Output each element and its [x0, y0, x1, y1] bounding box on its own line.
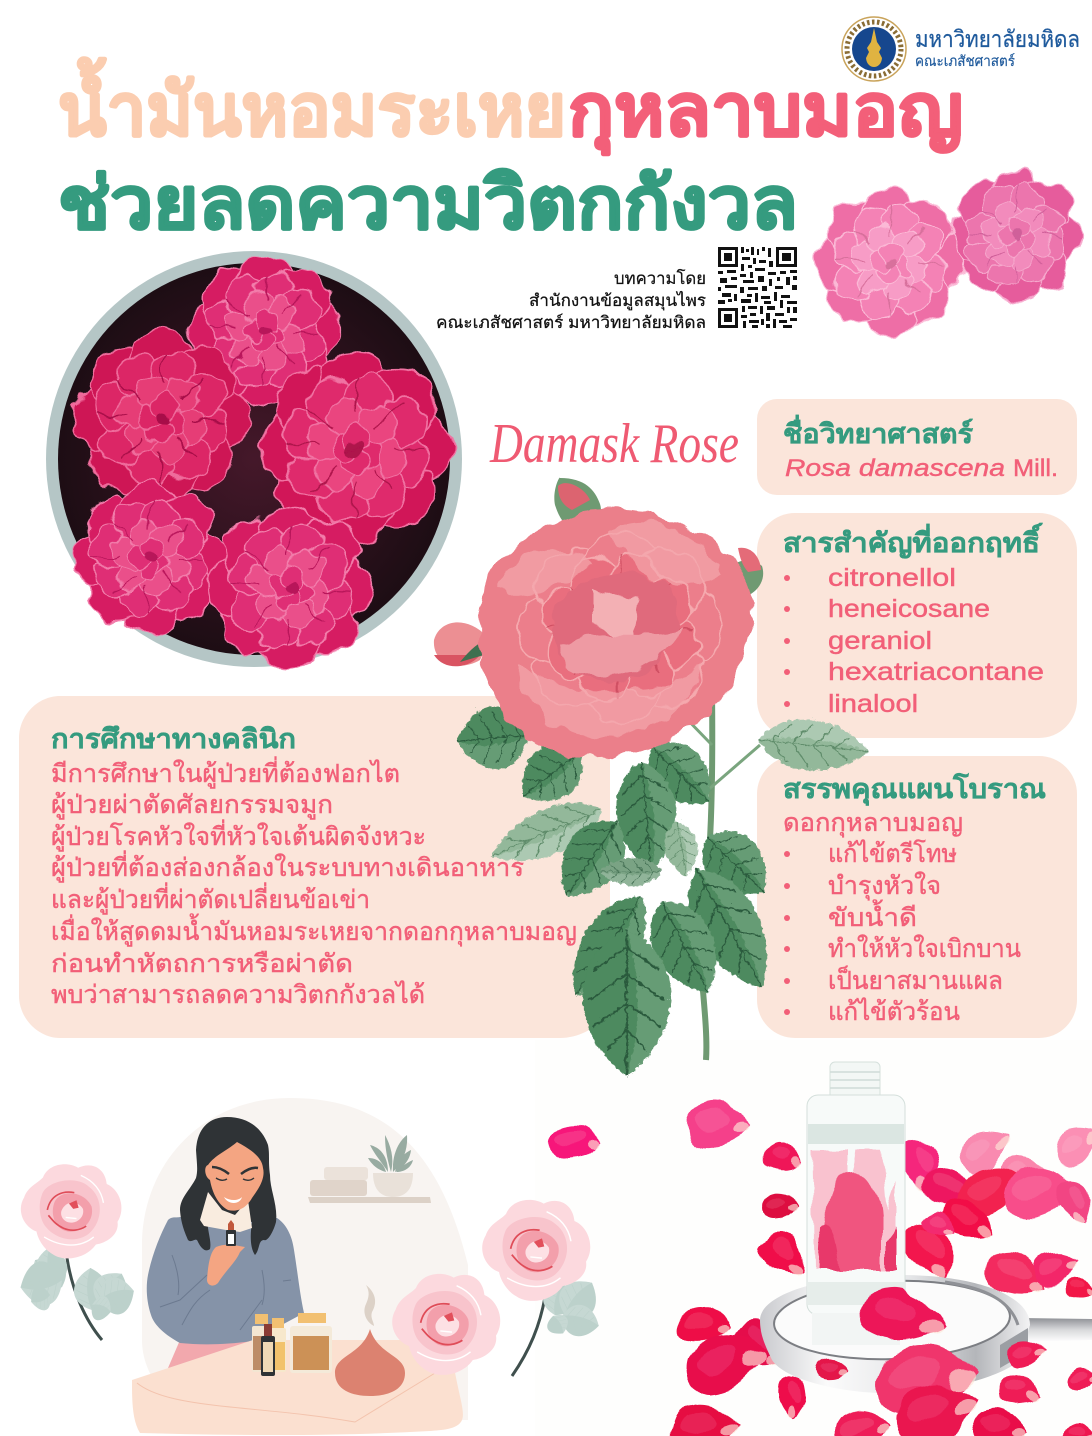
compound list: heneicosane: [828, 595, 990, 623]
compound list: linalool: [828, 690, 918, 718]
photo background: bottom right: [535, 1040, 1092, 1436]
uses list: แก้ไข้ตัวร้อน: [828, 997, 960, 1026]
compound list: citronellol: [828, 564, 956, 592]
panel: traditional uses: [757, 756, 1077, 1038]
panel: scientific name: ชื่อวิทยาศาสตร์: [783, 414, 974, 449]
panel: volatile compounds: สารสำคัญที่ออกฤทธิ์: [783, 523, 1043, 559]
title: น้ำมันหอมระเหย: [58, 57, 566, 151]
buds: [434, 478, 763, 666]
uses list: ขับน้ำดี: [828, 899, 917, 932]
title: กุหลาบมอญ: [568, 71, 963, 156]
QR code: [718, 247, 797, 328]
roses: [74, 255, 452, 669]
diffuser: [335, 1285, 405, 1396]
flower right with stem: [482, 1200, 606, 1376]
uses list: [784, 839, 1021, 1026]
body text: เมื่อให้สูดดมน้ำมันหอมระเหยจากดอกกุหลาบมอญ: [51, 913, 577, 947]
panel: traditional uses: สรรพคุณแผนโบราณ: [783, 772, 1046, 806]
panel: scientific name: [757, 399, 1077, 495]
body text: และผู้ป่วยที่ผ่าตัดเปลี่ยนข้อเข่า: [51, 882, 370, 915]
botanical rose illustration: [434, 478, 869, 1075]
foreground petals: [663, 1287, 1092, 1436]
title: ช่วยลดความวิตกกังวล: [58, 164, 798, 244]
glass bottle: [807, 1062, 905, 1345]
title: [58, 57, 963, 244]
woman: [147, 1117, 304, 1368]
flower head: [478, 509, 752, 757]
heading: การศึกษาทางคลินิก: [51, 724, 296, 754]
uses list: บำรุงหัวใจ: [828, 871, 941, 901]
table: [132, 1340, 463, 1435]
body text: ผู้ป่วยที่ต้องส่องกล้องในระบบทางเดินอาหาร: [51, 850, 524, 883]
compound list: hexatriacontane: [828, 658, 1044, 686]
photo: rose petals, bottle and mirror: [548, 1062, 1092, 1436]
uses list: ทำให้หัวใจเบิกบาน: [828, 934, 1021, 963]
flower on table: [392, 1274, 500, 1375]
wall shelf with books and plant: [308, 1135, 431, 1203]
credits: คณะเภสัชศาสตร์ มหาวิทยาลัยมหิดล: [436, 313, 706, 332]
background petals: [548, 1095, 1092, 1420]
photo: two pink roses: [816, 170, 1082, 336]
credits: [436, 269, 706, 332]
illustration: aromatherapy woman: [132, 1098, 500, 1435]
body text: ผู้ป่วยผ่าตัดศัลยกรรมจมูก: [51, 791, 333, 820]
panel: scientific name: Rosa damascena: [785, 455, 1005, 482]
body text: มีการศึกษาในผู้ป่วยที่ต้องฟอกไต: [51, 756, 400, 789]
credits: สำนักงานข้อมูลสมุนไพร: [529, 291, 706, 311]
mirror with handle: [760, 1275, 1092, 1393]
script title: Damask Rose: Damask Rose: [489, 413, 739, 475]
uses list: แก้ไข้ตรีโทษ: [828, 839, 957, 868]
arch background: [142, 1098, 468, 1420]
bowl: [46, 251, 462, 667]
panel: traditional uses: ดอกกุหลาบมอญ: [783, 809, 963, 838]
flower left with stem: [17, 1164, 139, 1340]
panel: scientific name: Mill.: [1013, 455, 1058, 482]
stem: [700, 690, 712, 1060]
panel: volatile compounds: [757, 513, 1077, 738]
body text: [51, 756, 577, 1009]
uses list: เป็นยาสมานแผล: [828, 965, 1003, 995]
logo: Mahidol University: คณะเภสัชศาสตร์: [915, 53, 1015, 70]
logo: Mahidol University: [842, 17, 1080, 81]
compound list: [784, 564, 1044, 718]
leaves: [453, 702, 869, 1075]
body text: ผู้ป่วยโรคหัวใจที่หัวใจเต้นผิดจังหวะ: [51, 819, 426, 852]
panel: clinical studies: [19, 696, 610, 1038]
body text: ก่อนทำหัตถการหรือผ่าตัด: [51, 950, 353, 978]
jars: [252, 1313, 332, 1376]
photo: bowl of damask roses: [46, 251, 462, 669]
compound list: geraniol: [828, 627, 932, 655]
body text: พบว่าสามารถลดความวิตกกังวลได้: [51, 980, 425, 1009]
credits: บทความโดย: [614, 269, 706, 288]
